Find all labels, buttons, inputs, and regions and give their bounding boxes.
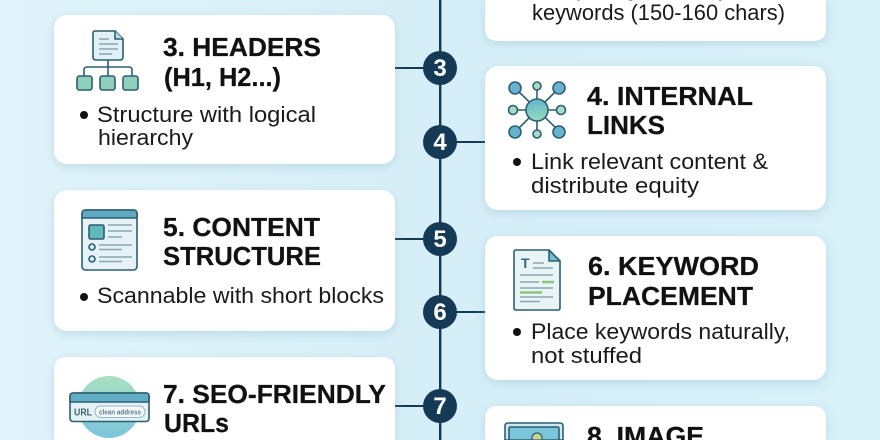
heading: LINKS [587, 112, 665, 140]
icon: picture frame [505, 423, 563, 440]
node 6: 6 [433, 299, 447, 326]
icon: page layout window [82, 210, 137, 270]
heading: 5. CONTENT [163, 214, 320, 242]
icon: document with highlighted keywords: T [521, 255, 530, 271]
panel: content structure [54, 190, 395, 331]
bullet text: Link relevant content & [531, 149, 768, 174]
bullet text: Scannable with short blocks [97, 283, 384, 308]
bullet text [513, 319, 790, 368]
icon: document hierarchy [77, 31, 138, 90]
node 6 [423, 295, 457, 329]
bullet text: Structure with logical [97, 102, 316, 127]
node 7: 7 [433, 393, 447, 420]
heading: PLACEMENT [588, 283, 753, 311]
heading: URLs [164, 410, 229, 438]
panel: headers [54, 15, 395, 164]
node 3: 3 [433, 55, 447, 82]
heading [587, 83, 753, 140]
node 5: 5 [433, 226, 447, 253]
heading [163, 381, 386, 438]
heading: (H1, H2...) [164, 64, 281, 92]
panel: internal links [485, 66, 826, 210]
node 4: 4 [433, 129, 447, 156]
bullet text: hierarchy [98, 125, 193, 150]
node 5 [423, 222, 457, 256]
bullet text: not stuffed [531, 343, 642, 368]
bullet text: Place keywords naturally, [531, 319, 790, 344]
heading: STRUCTURE [163, 243, 321, 271]
icon: URL browser bar [70, 376, 149, 438]
node 4 [423, 125, 457, 159]
icon: URL browser bar: URL [74, 408, 92, 418]
panel: image optimization (cropped) [485, 406, 826, 440]
bullet text: distribute equity [531, 173, 699, 198]
node 7 [423, 389, 457, 423]
heading [588, 253, 759, 311]
panel: meta description (cropped): keywords (150-160 chars) [532, 0, 785, 25]
icon: document with highlighted keywords [514, 250, 560, 310]
panel: meta description (cropped) [485, 0, 826, 41]
heading [163, 34, 321, 92]
bullet text [80, 102, 316, 150]
heading [163, 214, 321, 271]
heading: 6. KEYWORD [588, 253, 759, 281]
panel: keyword placement [485, 236, 826, 380]
timeline spine with connectors and numbered nodes [395, 0, 485, 440]
heading: 3. HEADERS [163, 34, 321, 62]
bullet text [513, 149, 768, 198]
heading: 4. INTERNAL [587, 83, 753, 111]
icon: link network [508, 82, 566, 138]
node 3 [423, 51, 457, 85]
panel: SEO-friendly URLs [54, 357, 395, 440]
icon: URL browser bar: clean address [99, 408, 141, 416]
heading: 7. SEO-FRIENDLY [163, 381, 386, 409]
